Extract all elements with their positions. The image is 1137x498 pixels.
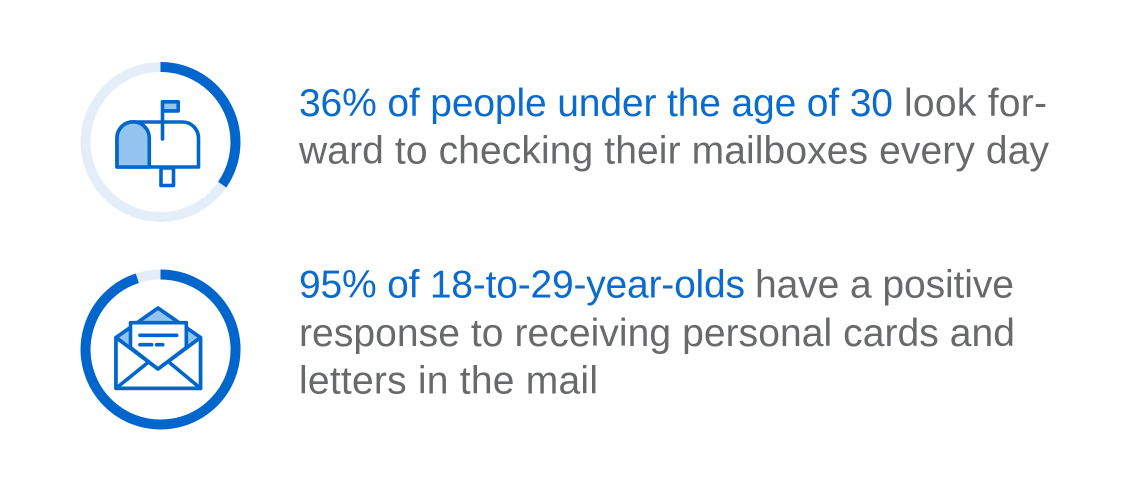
- progress ring: 36%: [86, 67, 236, 217]
- icon: mailbox: [117, 102, 198, 186]
- text: cards and letters statistic: 95% of 18-to-29-year-olds: [299, 264, 745, 306]
- text: mailbox statistic: look for-: [904, 82, 1047, 125]
- icon: open envelope with letter: [116, 308, 200, 388]
- text: cards and letters statistic: have a positive: [755, 264, 1014, 306]
- progress ring: 95%: [86, 274, 236, 424]
- text: mailbox statistic: 36% of people under the age of 30: [299, 82, 893, 125]
- text: cards and letters statistic: [299, 264, 1015, 402]
- text: mailbox statistic: [298, 82, 1050, 172]
- text: cards and letters statistic: response to receiving personal cards and: [299, 312, 1015, 355]
- text: cards and letters statistic: letters in the mail: [299, 360, 598, 402]
- text: mailbox statistic: ward to checking their mailboxes every day: [298, 130, 1050, 172]
